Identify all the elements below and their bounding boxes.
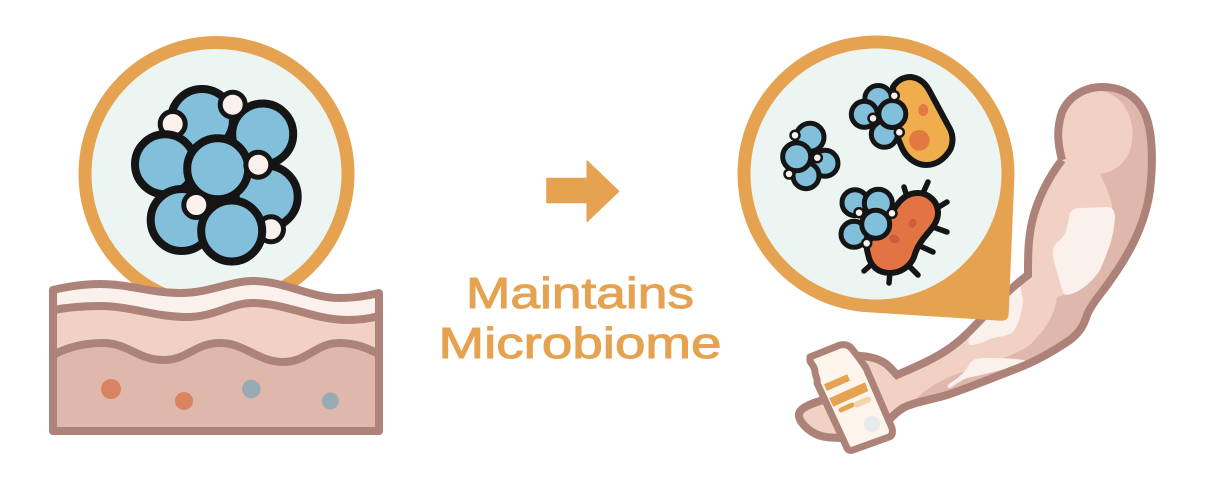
left lens circle [85, 42, 348, 306]
yellow bacterium spots [918, 104, 928, 116]
skin top layer [53, 281, 379, 320]
heading: Maintains Microbiome: Maintains [466, 270, 694, 318]
arm highlight: upper arm [1053, 207, 1115, 295]
bubble inner [750, 48, 1002, 300]
heading: Maintains Microbiome [438, 270, 722, 368]
heading: Maintains Microbiome: Microbiome [438, 320, 722, 368]
panel: arm with sunscreen [799, 87, 1152, 450]
orange bacterium [867, 193, 938, 273]
arm outline [850, 87, 1152, 425]
yellow bacterium [893, 77, 952, 165]
sunscreen bottle [810, 345, 892, 450]
arm highlight: forearm [968, 285, 1023, 345]
arm shadow [913, 89, 1152, 402]
arm highlight: lower arm [948, 358, 1026, 388]
yellow bacterium with microbes [851, 77, 952, 165]
bottle label bars [824, 374, 868, 407]
microbe cluster alone [783, 123, 838, 189]
skin layer outlines [53, 281, 379, 431]
orange bacterium spots [908, 218, 918, 229]
panel: left microbiome magnifier [85, 42, 348, 306]
skin deep layer [53, 343, 379, 431]
bubble shape [738, 36, 1014, 321]
thumb [799, 400, 850, 438]
attached microbes [841, 189, 896, 248]
bacteria cluster: balanced microbes [135, 89, 298, 262]
panel: right microbiome speech bubble [738, 36, 1014, 321]
orange spiky bacterium with microbes [841, 182, 947, 283]
bacterium spikes [864, 182, 947, 283]
attached microbes [851, 86, 906, 147]
bottle body [810, 345, 892, 450]
skin middle layer [53, 303, 379, 362]
skin dots [101, 379, 339, 410]
panel: skin cross-section [53, 281, 379, 431]
arm base [850, 87, 1152, 425]
bottle dot [864, 416, 880, 432]
arrow [547, 161, 619, 222]
